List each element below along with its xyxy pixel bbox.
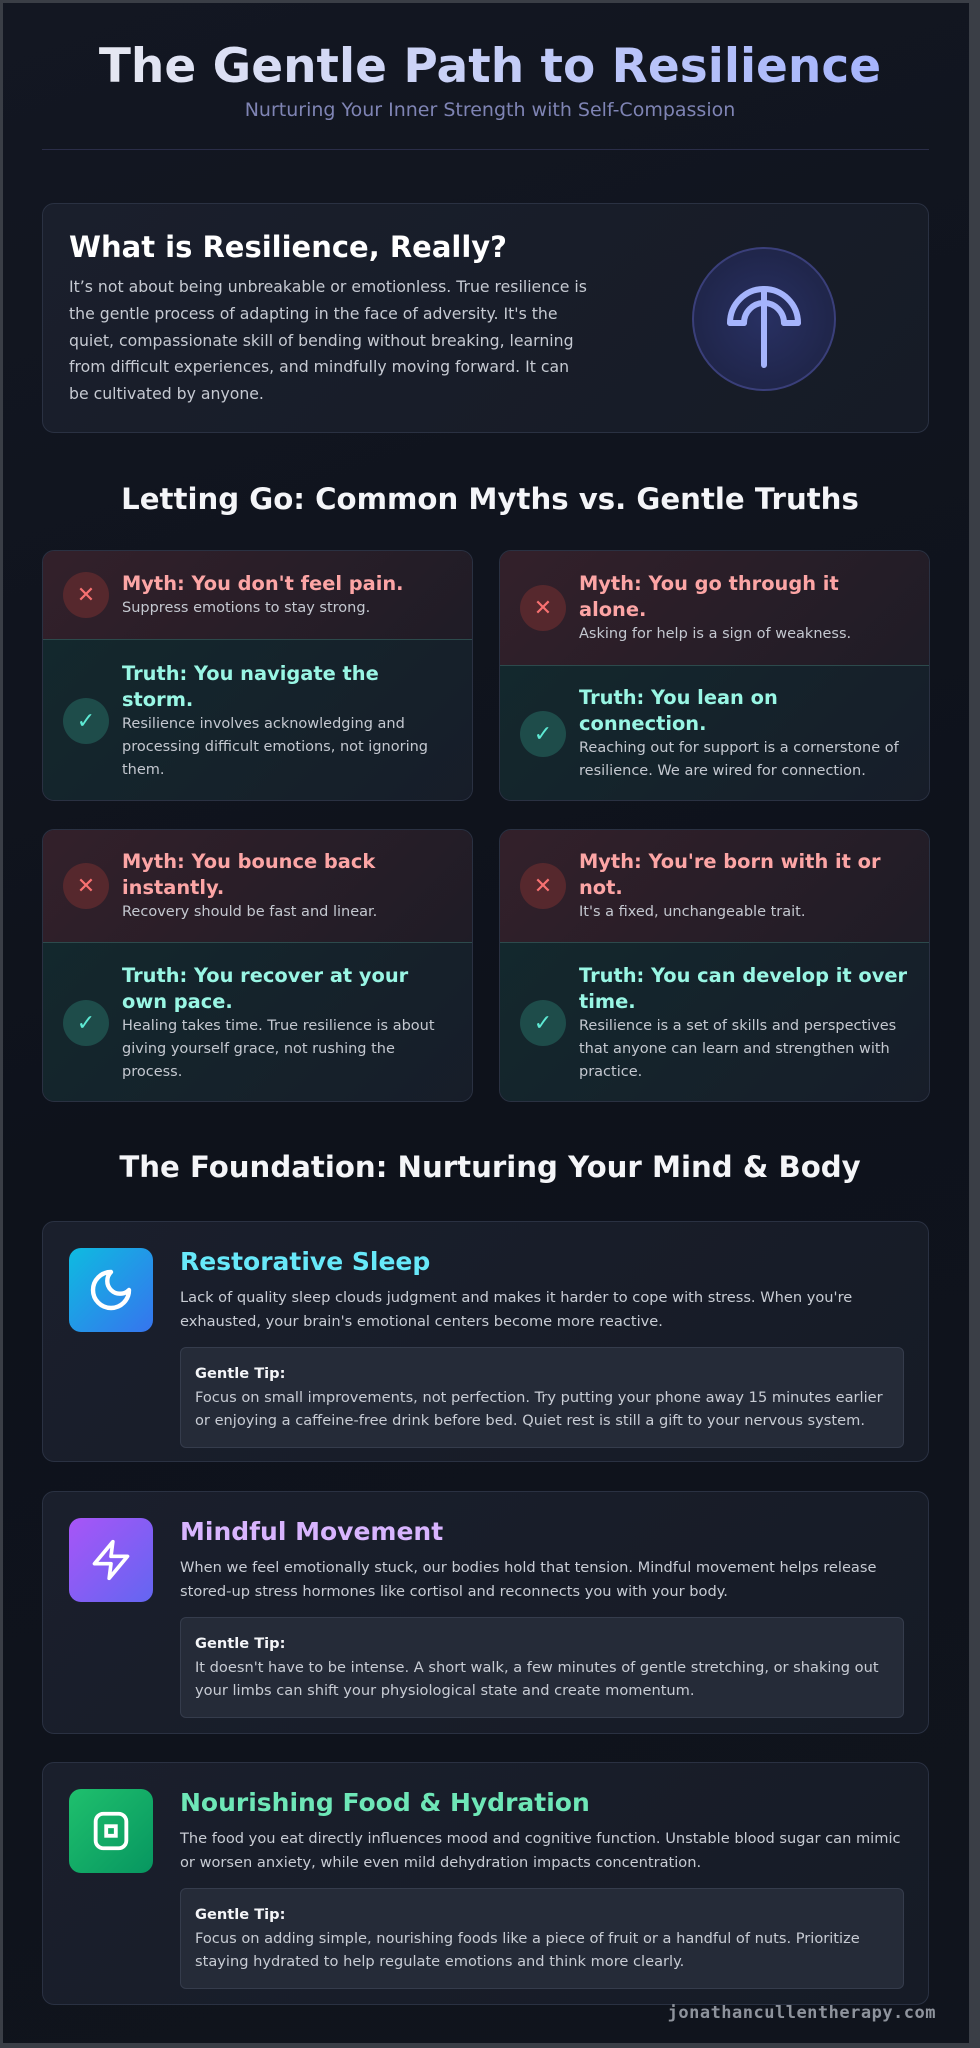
panel: myth 1: Resilience involves acknowledging and processing difficult emotions, not ignoring them. <box>122 716 428 778</box>
panel: sleep: Gentle Tip: <box>195 1365 285 1382</box>
panel: myth 2 <box>499 550 930 801</box>
panel: myth 3: Myth: You bounce back instantly. <box>122 850 375 898</box>
panel: myth 1: ✓ <box>77 708 95 734</box>
panel: sleep: Focus on small improvements, not perfection. Try putting your phone away 15 minutes earlier or enjoying a caffeine-free drink before bed. Quiet rest is still a gift to your nervous system. <box>195 1388 883 1429</box>
icon: lightning <box>69 1518 153 1602</box>
icon: moon <box>69 1248 153 1332</box>
panel: what is resilience <box>42 203 929 433</box>
panel: myth 4: Myth: You're born with it or not. <box>579 850 881 898</box>
panel: movement: It doesn't have to be intense. A short walk, a few minutes of gentle stretching, or shaking out your limbs can shift your physiological state and create momentum. <box>195 1658 879 1699</box>
footer url: jonathancullentherapy.com <box>668 2003 936 2023</box>
panel: movement <box>42 1491 929 1734</box>
panel: myth 1: Myth: You don't feel pain. <box>122 572 404 594</box>
panel: myth 1: ✕ <box>77 582 95 608</box>
panel: movement: Mindful Movement <box>180 1517 443 1546</box>
subtitle: Nurturing Your Inner Strength with Self-Compassion <box>245 99 735 121</box>
panel: myth 3: Truth: You recover at your own pace. <box>122 964 408 1012</box>
panel: myth 4: ✕ <box>534 874 552 898</box>
panel: food: Focus on adding simple, nourishing foods like a piece of fruit or a handful of nuts. Prioritize staying hydrated to help regulate emotions and think more clearly. <box>195 1930 860 1970</box>
text block: It’s not about being unbreakable or emotionless. True resilience is the gentle process of adapting in the face of adversity. It's the quiet, compassionate skill of bending without breaking, learning from difficult experiences, and mindfully moving forward. It can be cultivated by anyone. <box>69 277 587 403</box>
panel: myth 2: Reaching out for support is a cornerstone of resilience. We are wired for connection. <box>579 740 899 779</box>
panel: myth 3: Recovery should be fast and linear. <box>122 904 377 920</box>
panel: myth 4 <box>499 829 930 1102</box>
icon: food <box>69 1789 153 1873</box>
panel: myth 4: It's a fixed, unchangeable trait. <box>579 904 805 920</box>
heading: What is Resilience, Really? <box>69 230 507 264</box>
panel: myth 3: ✓ <box>77 1010 95 1036</box>
panel: myth 2: Myth: You go through it alone. <box>579 572 839 620</box>
panel: myth 3 <box>42 829 473 1102</box>
panel: myth 4: ✓ <box>534 1010 552 1036</box>
panel: myth 4: Truth: You can develop it over time. <box>579 964 907 1012</box>
heading: foundation: The Foundation: Nurturing Your Mind & Body <box>119 1150 861 1184</box>
panel: myth 3: ✕ <box>77 874 95 898</box>
panel: movement: When we feel emotionally stuck, our bodies hold that tension. Mindful movement helps release stored-up stress hormones like cortisol and reconnects you with your body. <box>180 1559 876 1600</box>
heading: myths: Letting Go: Common Myths vs. Gentle Truths <box>121 482 859 516</box>
panel: myth 3: Healing takes time. True resilience is about giving yourself grace, not rushing the process. <box>122 1018 435 1080</box>
panel: myth 1 <box>42 550 473 801</box>
panel: myth 1: Suppress emotions to stay strong. <box>122 600 370 616</box>
panel: myth 2: Asking for help is a sign of weakness. <box>579 626 851 642</box>
icon: resilience <box>692 247 836 391</box>
title: The Gentle Path to Resilience <box>99 39 881 94</box>
panel: food <box>42 1762 929 2005</box>
panel: myth 2: ✕ <box>534 596 552 620</box>
panel: sleep: Lack of quality sleep clouds judgment and makes it harder to cope with stress. When you're exhausted, your brain's emotional centers become more reactive. <box>180 1289 852 1330</box>
panel: sleep <box>42 1221 929 1462</box>
panel: movement: Gentle Tip: <box>195 1635 285 1652</box>
panel: myth 2: ✓ <box>534 722 552 746</box>
panel: food: The food you eat directly influences mood and cognitive function. Unstable blood sugar can mimic or worsen anxiety, while even mild dehydration impacts concentration. <box>180 1830 901 1870</box>
panel: myth 2: Truth: You lean on connection. <box>579 686 778 735</box>
panel: myth 1: Truth: You navigate the storm. <box>122 662 379 710</box>
panel: myth 4: Resilience is a set of skills and perspectives that anyone can learn and strengthen with practice. <box>579 1018 896 1080</box>
panel: food: Nourishing Food & Hydration <box>180 1788 590 1817</box>
panel: food: Gentle Tip: <box>195 1906 285 1923</box>
panel: sleep: Restorative Sleep <box>180 1247 430 1276</box>
